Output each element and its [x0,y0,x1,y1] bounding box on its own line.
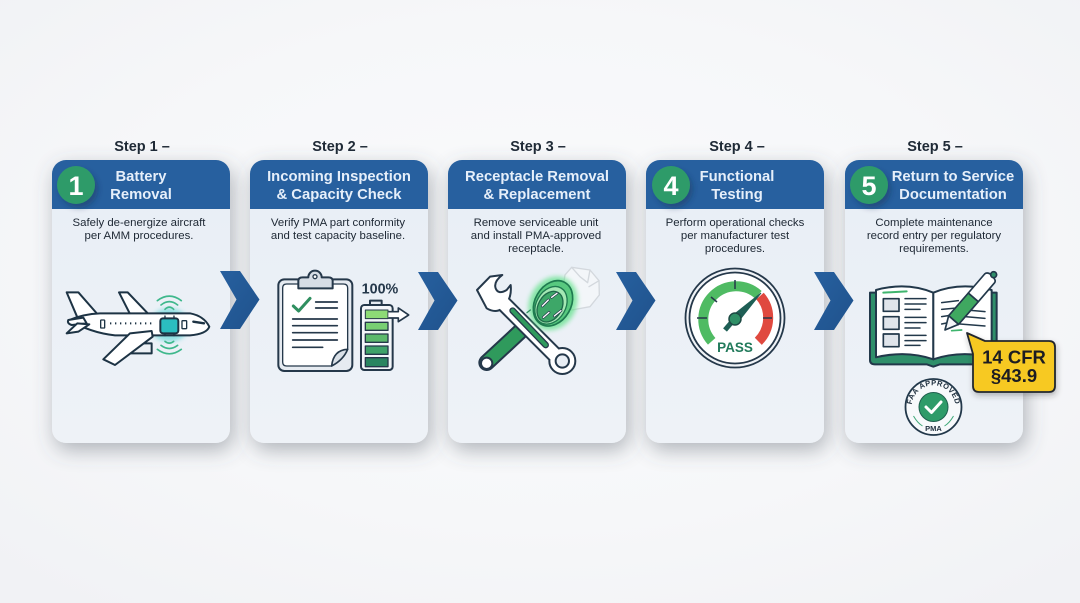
step 4 description: per manufacturer test [681,230,790,242]
icon: pass gauge [686,268,784,368]
step 2 title: & Capacity Check [276,187,402,203]
step 5 description: record entry per regulatory [867,230,1001,242]
step 1 description: per AMM procedures. [85,230,193,242]
callout: 14 CFR §43.9: §43.9 [991,365,1037,386]
panel: step 5 return to service [837,139,1060,462]
step 5 header [845,160,1023,209]
icon: clipboard [278,271,352,371]
step 5 description: requirements. [899,243,969,255]
step 4 badge: 4 [663,171,679,201]
panel: step 4 functional testing [646,139,824,443]
step 1 title: Removal [110,187,172,203]
panel: step 1 battery removal [52,139,230,443]
step 3 title: & Replacement [484,187,591,203]
icon: pass gauge: PASS [717,340,753,355]
step 4 label: Step 4 – [709,139,765,155]
step 3 description: Remove serviceable unit [474,217,599,229]
step 3 label: Step 3 – [510,139,566,155]
step 2 title: Incoming Inspection [267,169,411,185]
icon: FAA approved PMA seal: FAA APPROVED [906,380,960,404]
icon: battery 100% [361,281,409,370]
step 2 card [250,160,428,443]
step 4 description: Perform operational checks [666,217,805,229]
step 3 title: Receptacle Removal [465,169,609,185]
step 2 description: Verify PMA part conformity [271,217,405,229]
step 5 card [845,160,1023,443]
step 1 header [52,160,230,209]
step 3 card [448,160,626,443]
step 1 badge [57,166,95,204]
callout: 14 CFR §43.9: 14 CFR [982,346,1046,368]
step 1 description: Safely de-energize aircraft [73,217,206,229]
icon: connector receptacle [519,267,599,339]
callout: 14 CFR §43.9 [967,333,1055,392]
step 5 title: Documentation [899,187,1007,203]
arrow: step 2 to 3 [418,272,458,330]
arrow: step 1 to 2 [220,271,260,329]
panel: step 3 receptacle replacement [448,139,626,443]
step 5 badge: 5 [861,171,877,201]
step 1 title: Battery [116,169,167,185]
icon: open book and pen [870,272,997,367]
step 3 description: receptacle. [508,243,564,255]
icon: wrench and screwdriver [477,275,575,374]
step 2 label: Step 2 – [312,139,368,155]
step 2 header [250,160,428,209]
icon: airplane with battery [67,292,209,365]
step 3 header [448,160,626,209]
icon: battery 100%: 100% [362,281,399,297]
step 4 card [646,160,824,443]
step 4 header [646,160,824,209]
step 4 badge [652,166,690,204]
step 1 badge: 1 [68,171,84,201]
step 3 description: and install PMA-approved [471,230,601,242]
step 5 label: Step 5 – [907,139,963,155]
icon: FAA approved PMA seal: PMA [925,424,942,433]
step 5 title: Return to Service [892,169,1014,185]
step 5 description: Complete maintenance [875,217,993,229]
step 4 title: Testing [711,187,763,203]
panel: step 2 incoming inspection [250,139,428,443]
arrow: step 4 to 5 [814,272,854,330]
step 1 card [52,160,230,443]
arrow: step 3 to 4 [616,272,656,330]
step 5 badge [850,166,888,204]
step 2 description: and test capacity baseline. [271,230,405,242]
step 4 description: procedures. [705,243,765,255]
icon: FAA approved PMA seal [904,378,962,436]
step 4 title: Functional [700,169,774,185]
step 1 label: Step 1 – [114,139,170,155]
